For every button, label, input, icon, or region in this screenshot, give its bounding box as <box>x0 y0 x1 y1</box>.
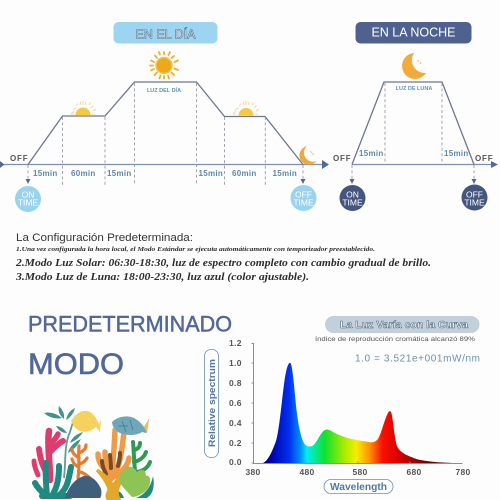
axes <box>252 343 462 464</box>
on time marker <box>340 165 366 211</box>
duration labels: 60min <box>232 169 257 178</box>
brown coral accents <box>102 453 120 474</box>
duration labels: 60min <box>71 169 96 178</box>
orange coral left <box>72 445 89 478</box>
off time marker: OFF <box>295 190 312 200</box>
label: 15min right: 15min <box>444 149 469 158</box>
y axis values <box>229 338 242 467</box>
off time marker <box>462 165 488 210</box>
heading: en el día: EN EL DÍA <box>136 26 196 42</box>
callout: curve heading: La Luz Varía con la Curva <box>340 320 468 331</box>
y axis values: 0.2 <box>229 438 242 448</box>
y axis title: Relative spectrum <box>207 359 218 447</box>
title: modo: MODO <box>28 348 124 381</box>
settings line 1: 1.Una vez configurada la hora local, el Modo Estándar se ejecuta automáticamente con temporizador preestablecido. <box>16 247 376 253</box>
callout: curve heading <box>325 316 480 333</box>
night chart <box>333 22 498 211</box>
spectrum area <box>263 363 457 463</box>
seaweed stem and leaves <box>44 406 83 478</box>
color rendering note: índice de reproducción cromática alcanzó 89% <box>315 336 475 343</box>
x axis values: 680 <box>406 467 422 477</box>
y axis values: 0.4 <box>229 418 242 428</box>
duration labels: 15min <box>33 169 58 178</box>
icon: sun rays small left <box>71 101 96 115</box>
x axis values <box>245 467 471 477</box>
green coral <box>133 442 150 480</box>
lime coral <box>120 467 150 497</box>
y axis values: 1.2 <box>229 338 242 348</box>
x axis values: 480 <box>299 467 315 477</box>
blue fish <box>112 416 149 435</box>
orange coral right <box>98 430 129 488</box>
settings line 2: 2.Modo Luz Solar: 06:30-18:30, luz de espectro completo con cambio gradual de brillo. <box>15 257 431 269</box>
x axis values: 380 <box>245 467 261 477</box>
heading: en la noche <box>356 22 472 44</box>
yellow fish <box>71 411 101 432</box>
scale value: 1.0 = 3.521e+001mW/nm <box>355 354 480 364</box>
icon: moon <box>402 53 426 79</box>
time axis <box>352 161 498 168</box>
icon: small moon <box>299 146 316 165</box>
off time marker: OFF <box>466 190 483 200</box>
duration labels: 15min <box>198 169 223 178</box>
x axis title <box>324 480 393 494</box>
y axis values: 1.0 <box>229 358 242 368</box>
duration labels: 15min <box>272 169 297 178</box>
yellow coral base <box>97 470 130 499</box>
illustration: coral reef and fish <box>34 406 154 499</box>
icon: large sun <box>150 52 178 78</box>
spectrum chart <box>204 338 471 494</box>
off time marker <box>290 165 316 211</box>
settings heading: La Configuración Predeterminada: <box>16 232 193 244</box>
pink coral <box>34 431 63 480</box>
duration labels: 15min <box>107 169 132 178</box>
on time marker: TIME <box>342 198 363 208</box>
x axis title: Wavelength <box>330 482 387 493</box>
title: predeterminado: PREDETERMINADO <box>28 312 232 336</box>
y axis values: 0.6 <box>229 398 242 408</box>
on time marker: TIME <box>18 198 38 208</box>
on time marker: ON <box>22 190 34 200</box>
teal seaweed left <box>35 463 71 496</box>
x axis values: 580 <box>352 467 368 477</box>
off time marker: TIME <box>464 198 485 208</box>
light level curve <box>352 82 474 164</box>
y axis title <box>204 350 218 458</box>
phase dividers <box>385 83 442 163</box>
grey rock <box>65 476 101 498</box>
label: luz de luna: LUZ DE LUNA <box>396 86 432 92</box>
off time marker: TIME <box>293 198 314 208</box>
default settings text block <box>15 232 431 283</box>
label: luz del día: LUZ DEL DÍA <box>147 86 181 94</box>
settings line 3: 3.Modo Luz de Luna: 18:00-23:30, luz azul (color ajustable). <box>15 271 309 283</box>
teal seaweed right <box>113 476 154 498</box>
y axis values: 0.0 <box>229 457 242 467</box>
label: off right: OFF <box>475 154 493 163</box>
label: 15min left: 15min <box>359 149 384 158</box>
duration labels <box>33 169 297 178</box>
icon: sun rays small right <box>233 101 259 116</box>
x axis values: 780 <box>455 467 471 477</box>
label: off left: OFF <box>333 154 351 163</box>
on time marker <box>15 165 41 212</box>
light level curve <box>28 82 303 164</box>
label: off: OFF <box>10 154 28 163</box>
heading: en el día <box>114 22 218 44</box>
time axis <box>0 160 329 169</box>
y axis values: 0.8 <box>229 378 242 388</box>
heading: en la noche: EN LA NOCHE <box>371 26 456 40</box>
on time marker: ON <box>346 190 359 200</box>
phase dividers <box>62 83 265 185</box>
day chart <box>0 22 329 212</box>
